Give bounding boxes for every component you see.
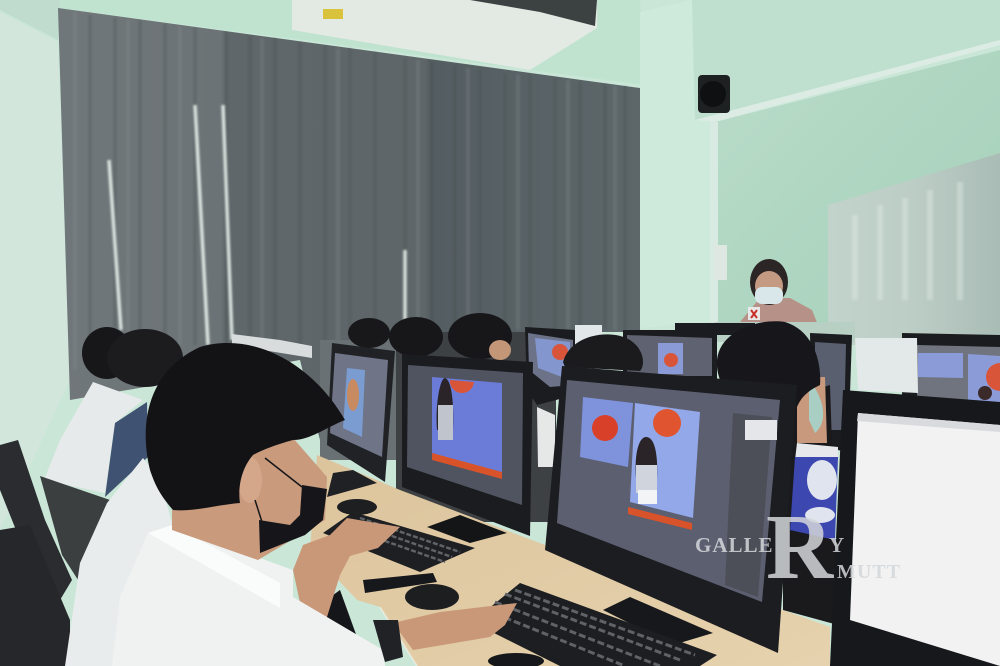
chairs <box>0 440 110 666</box>
whiteboard <box>828 153 1000 345</box>
keyboard: front <box>472 583 717 666</box>
monitor: right foreground <box>830 390 1000 666</box>
watermark: GALLERY RMUTT: R <box>766 496 834 599</box>
watermark: GALLERY RMUTT: GALLE <box>695 533 774 557</box>
watermark: GALLERY RMUTT: Y <box>829 533 844 557</box>
watermark: GALLERY RMUTT: MUTT <box>837 561 901 583</box>
student at right <box>717 321 838 625</box>
speaker <box>698 75 730 113</box>
student at front: watch <box>373 620 403 662</box>
watermark: GALLERY RMUTT <box>695 496 901 599</box>
monitor: front centre <box>545 366 797 653</box>
air conditioner <box>292 0 597 70</box>
student at front: head and mask <box>146 343 345 560</box>
monitor: third row <box>327 343 395 482</box>
student at front: shirt <box>112 525 385 666</box>
phone at bottom edge <box>488 653 544 666</box>
monitor: second row <box>402 354 533 543</box>
desk <box>310 455 830 666</box>
teacher <box>740 259 822 335</box>
student at front: arms <box>293 518 517 650</box>
student in second seat: shirt <box>65 458 172 666</box>
phone and mouse <box>363 573 459 610</box>
small keyboard and mouse rear <box>327 470 377 515</box>
back row monitors <box>232 323 1000 452</box>
back row students <box>44 313 643 497</box>
curtains <box>58 8 640 440</box>
keyboard: second row <box>323 512 475 572</box>
back row surface <box>320 322 855 522</box>
